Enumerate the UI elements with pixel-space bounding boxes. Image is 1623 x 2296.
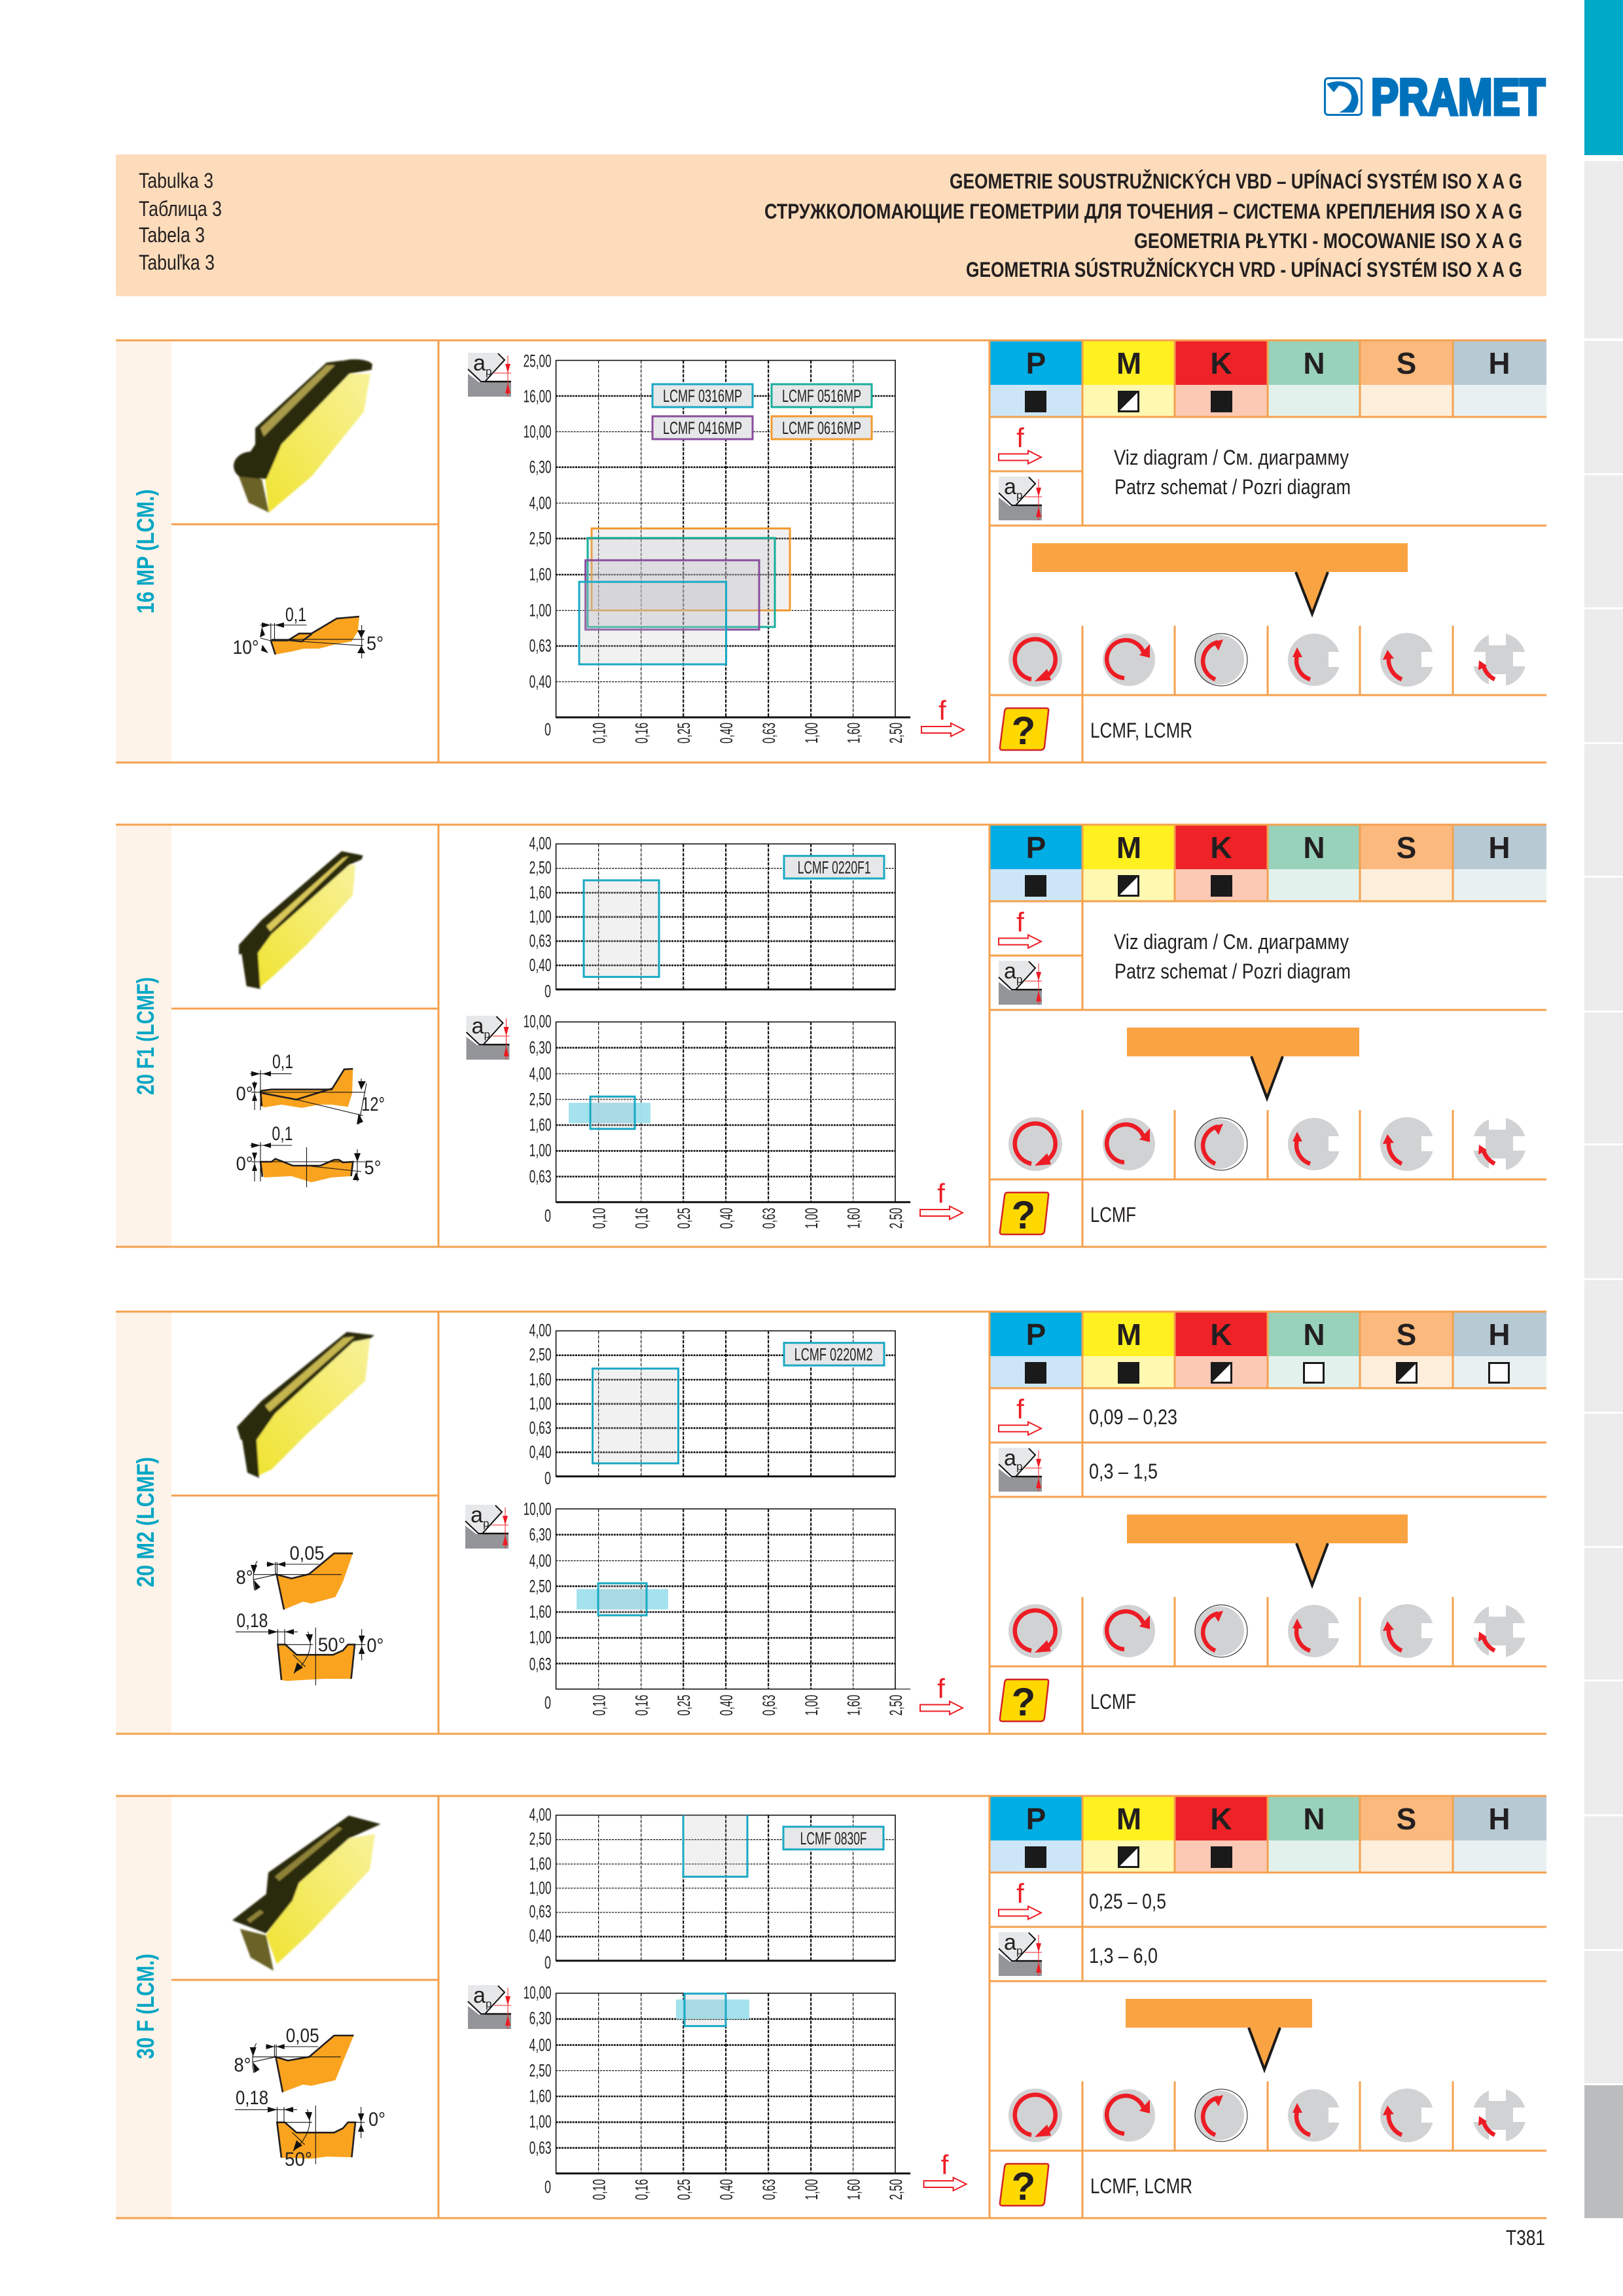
y axis labels: 1,00 — [529, 1393, 552, 1413]
table labels: Таблица 3 — [139, 197, 222, 221]
panel: 20 F1 (LCMF) — [116, 825, 1546, 1247]
range: LCMF 0220F1 — [584, 880, 659, 977]
legend: LCMF 0516MP — [782, 386, 861, 406]
y axis labels: 2,50 — [529, 1344, 552, 1364]
x axis labels: 0,63 — [759, 723, 779, 744]
icon: question: ? — [1012, 709, 1035, 753]
range: LCMF 0616MP — [592, 528, 790, 611]
feed value: 0,09 – 0,23 — [1089, 1405, 1177, 1429]
cutting profile: side: 12° — [361, 1094, 385, 1115]
y axis labels: 0,63 — [529, 1166, 552, 1186]
chart: ap vs f — [524, 351, 910, 744]
y axis labels — [524, 351, 552, 740]
legend: LCMF 0416MP — [663, 418, 742, 438]
cutting profile: front: 0,18 — [236, 1610, 268, 1632]
cutting profile: front: 50° — [318, 1634, 346, 1656]
header band — [116, 154, 1546, 296]
depth value: 0,3 – 1,5 — [1089, 1460, 1158, 1483]
icon: question — [1000, 2164, 1048, 2208]
y axis labels: 0 — [544, 981, 551, 1001]
material header letters: N — [1303, 346, 1325, 380]
y axis labels: 1,00 — [529, 906, 552, 926]
icon: feed row: f — [1016, 423, 1024, 453]
panel label: 20 M2 (LCMF) — [132, 1457, 159, 1587]
material header letters: M — [1116, 1318, 1141, 1352]
y axis labels: 1,60 — [529, 565, 552, 584]
x axis labels: 1,00 — [802, 1695, 821, 1715]
material header letters — [1026, 1802, 1510, 1836]
suitability marks — [1025, 1362, 1509, 1384]
icon: depth row: a — [1004, 1930, 1016, 1955]
icon: ap chart axis — [468, 1983, 511, 2029]
insert types: LCMF, LCMR — [1090, 2174, 1192, 2198]
x axis labels: 0,63 — [759, 2179, 779, 2200]
x axis labels: 0,10 — [590, 2179, 609, 2200]
y axis labels: 0,63 — [529, 636, 552, 656]
cutting profile: front: 5° — [364, 1157, 381, 1179]
x axis labels: 0,25 — [674, 1208, 694, 1229]
material header letters: N — [1303, 1802, 1325, 1836]
y axis labels: 0,63 — [529, 1418, 552, 1437]
cutting profile: side — [236, 1543, 353, 1609]
range: LCMF 0220M2 — [593, 1369, 678, 1463]
chart: lower range — [524, 1499, 910, 1715]
title: GEOMETRIA PŁYTKI - MOCOWANIE ISO X A G — [1134, 229, 1522, 253]
cutting profile: side: 8° — [236, 1567, 253, 1588]
y axis labels: 2,50 — [529, 529, 552, 548]
y axis labels: 16,00 — [524, 387, 552, 406]
x axis labels: 2,50 — [886, 723, 906, 744]
side tabs — [1584, 0, 1623, 2218]
title — [764, 170, 1522, 281]
y axis labels: 2,50 — [529, 857, 552, 877]
panel: 16 MP (LCM.) — [116, 340, 1546, 762]
icon: question: ? — [1012, 2164, 1035, 2208]
icon: depth row — [999, 1446, 1042, 1492]
chart: lower range — [524, 1982, 910, 2200]
x axis labels: 0,16 — [632, 2179, 652, 2200]
icon: depth row: a — [1004, 1446, 1016, 1471]
icon: f chart axis — [924, 2149, 967, 2191]
chart: upper range — [529, 833, 895, 1001]
insert types: LCMF — [1090, 1203, 1136, 1227]
material header letters: H — [1488, 1318, 1510, 1352]
icon: feed row — [999, 907, 1041, 948]
y axis labels — [524, 1982, 552, 2197]
cutting profile: front: 0,18 — [236, 2087, 268, 2109]
x axis labels — [590, 723, 906, 744]
suitability marks — [1025, 875, 1232, 897]
note: see diagram: Viz diagram / См. диаграмму — [1114, 446, 1349, 469]
logo wordmark: PRAMET — [1371, 68, 1545, 126]
logo mark — [1325, 79, 1361, 115]
suitability marks — [1025, 1846, 1232, 1868]
y axis labels: 25,00 — [524, 351, 552, 371]
operation icons — [1008, 2088, 1527, 2143]
panel label: 16 MP (LCM.) — [132, 490, 159, 614]
x axis labels: 0,10 — [590, 1208, 609, 1229]
material header letters: H — [1488, 831, 1510, 865]
operation icons — [1008, 1117, 1527, 1172]
y axis labels: 0 — [544, 720, 551, 740]
table labels — [139, 169, 222, 274]
x axis labels: 0,40 — [717, 1208, 736, 1229]
cutting profile: front — [235, 2087, 385, 2170]
icon: feed row — [999, 423, 1041, 463]
y axis labels: 1,00 — [529, 601, 552, 620]
material header letters: K — [1210, 1318, 1232, 1352]
note: see diagram: Patrz schemat / Pozri diagram — [1115, 475, 1351, 499]
range: LCMF 0516MP — [588, 538, 775, 627]
icon: question — [1000, 1193, 1048, 1237]
material header letters: P — [1026, 831, 1046, 865]
insert photo — [232, 1816, 381, 1971]
range: LCMF 0830F — [685, 1994, 726, 2026]
x axis labels: 1,00 — [802, 1208, 821, 1229]
icon: ap chart axis: p — [486, 1998, 491, 2010]
material header letters: K — [1210, 1802, 1232, 1836]
x axis labels: 0,63 — [759, 1695, 779, 1715]
material header letters: P — [1026, 1318, 1046, 1352]
material header letters: P — [1026, 1802, 1046, 1836]
icon: ap chart axis — [465, 1503, 508, 1549]
cutting profile: side: 0,1 — [272, 1051, 293, 1073]
cutting profile: 5° — [366, 633, 383, 655]
cutting profile: front: 0° — [236, 1153, 253, 1175]
legend — [784, 856, 884, 878]
y axis labels: 0,40 — [529, 955, 552, 975]
y axis labels: 0,63 — [529, 931, 552, 950]
y axis labels: 1,00 — [529, 2111, 552, 2131]
insert photo — [237, 1332, 374, 1478]
y axis labels: 0,63 — [529, 1654, 552, 1674]
insert photo — [239, 851, 363, 989]
y axis labels: 10,00 — [524, 422, 552, 442]
x axis labels: 0,63 — [759, 1208, 779, 1229]
icon: depth row — [999, 475, 1042, 520]
x axis labels: 0,10 — [590, 723, 609, 744]
y axis labels: 1,00 — [529, 1627, 552, 1647]
icon: f chart axis: f — [941, 2149, 949, 2180]
legend: LCMF 0316MP — [663, 386, 742, 406]
suitability marks — [1025, 391, 1232, 412]
x axis labels: 1,00 — [802, 723, 821, 744]
x axis labels: 0,10 — [590, 1695, 609, 1715]
application range bar — [1032, 543, 1408, 614]
icon: depth row: p — [1016, 1460, 1022, 1473]
x axis labels: 2,50 — [886, 1208, 906, 1229]
icon: ap chart axis: p — [483, 1517, 489, 1530]
chart: upper range — [529, 1804, 895, 1972]
legend: LCMF 0830F — [800, 1829, 867, 1848]
material header letters: S — [1397, 1318, 1416, 1352]
y axis labels: 2,50 — [529, 1576, 552, 1596]
y axis labels: 0 — [544, 1206, 551, 1225]
x axis labels — [590, 2179, 906, 2200]
x axis labels: 0,25 — [674, 1695, 694, 1715]
material header letters: S — [1397, 1802, 1416, 1836]
icon: ap chart axis — [468, 351, 511, 397]
icon: f chart axis — [921, 695, 964, 736]
cutting profile: side: 0,05 — [289, 1543, 325, 1564]
legend — [784, 1343, 884, 1365]
y axis labels: 1,60 — [529, 1854, 552, 1873]
y axis labels — [524, 1499, 552, 1712]
legend: LCMF 0220F1 — [798, 858, 871, 878]
y axis labels: 2,50 — [529, 2060, 552, 2080]
x axis labels: 0,40 — [717, 723, 736, 744]
cutting profile: side: 0,05 — [286, 2025, 319, 2047]
note: see diagram — [1114, 930, 1351, 983]
insert types: LCMF, LCMR — [1090, 719, 1192, 742]
y axis labels — [529, 1320, 552, 1488]
application range bar — [1127, 1515, 1408, 1585]
x axis labels: 2,50 — [886, 2179, 906, 2200]
operation icons — [1008, 1604, 1527, 1659]
range: LCMF 0220M2 — [598, 1583, 647, 1615]
legend: LCMF 0220M2 — [794, 1345, 873, 1365]
icon: f chart axis: f — [937, 1673, 945, 1704]
y axis labels: 0 — [544, 2177, 551, 2197]
table labels: Tabulka 3 — [139, 169, 213, 192]
y axis labels: 1,60 — [529, 1115, 552, 1134]
feed value: 0,25 – 0,5 — [1089, 1890, 1166, 1913]
icon: question — [1000, 1679, 1048, 1724]
note: see diagram: Patrz schemat / Pozri diagram — [1115, 960, 1351, 983]
material header letters: H — [1488, 1802, 1510, 1836]
x axis labels — [590, 1208, 906, 1229]
icon: feed row: f — [1016, 1394, 1024, 1424]
material header letters: N — [1303, 1318, 1325, 1352]
legend: LCMF 0616MP — [782, 418, 861, 438]
icon: question: ? — [1012, 1680, 1035, 1724]
y axis labels: 6,30 — [529, 457, 552, 477]
icon: depth row: p — [1016, 973, 1022, 986]
x axis labels — [590, 1695, 906, 1715]
x axis labels: 0,40 — [717, 2179, 736, 2200]
cutting profile: front — [236, 1610, 383, 1685]
y axis labels: 0 — [544, 1468, 551, 1488]
icon: depth row: a — [1004, 959, 1016, 984]
material header letters: M — [1116, 1802, 1141, 1836]
cutting profile: front: 0° — [366, 1635, 383, 1657]
x axis labels: 1,60 — [844, 723, 864, 744]
y axis labels: 4,00 — [529, 2035, 552, 2054]
y axis labels — [529, 1804, 552, 1972]
y axis labels: 10,00 — [524, 1982, 552, 2002]
panel label: 20 F1 (LCMF) — [132, 977, 159, 1095]
material header letters: K — [1210, 346, 1232, 380]
chart: upper range — [529, 1320, 895, 1488]
application range bar — [1126, 1999, 1312, 2070]
range: LCMF 0220F1 — [590, 1096, 635, 1129]
depth value: 1,3 – 6,0 — [1089, 1944, 1158, 1967]
cutting profile: side: 8° — [234, 2054, 251, 2076]
icon: f chart axis — [920, 1178, 963, 1219]
icon: ap chart axis: a — [473, 351, 486, 376]
y axis labels: 2,50 — [529, 1829, 552, 1848]
title: GEOMETRIA SÚSTRUŽNÍCKYCH VRD - UPÍNACÍ SYSTÉM ISO X A G — [966, 258, 1522, 281]
logo: PRAMET — [1325, 68, 1545, 126]
range: LCMF 0416MP — [586, 560, 759, 630]
icon: depth row — [999, 1930, 1042, 1976]
section tab — [1584, 2085, 1623, 2218]
operation icons — [1008, 632, 1527, 687]
icon: ap chart axis: a — [473, 1983, 486, 2008]
icon: depth row: p — [1016, 1945, 1022, 1957]
icon: depth row — [999, 959, 1042, 1005]
y axis labels: 1,60 — [529, 1369, 552, 1389]
icon: feed row: f — [1016, 907, 1024, 937]
cutting profile: side: 0° — [236, 1083, 253, 1105]
cutting profile: front: 0,1 — [272, 1123, 293, 1145]
material header letters: M — [1116, 831, 1141, 865]
y axis labels: 1,60 — [529, 1602, 552, 1621]
x axis labels: 0,16 — [632, 1208, 652, 1229]
cutting profile: side — [234, 2025, 353, 2092]
material header letters: M — [1116, 346, 1141, 380]
panel: 30 F (LCM.) — [116, 1796, 1546, 2218]
icon: ap chart axis: a — [471, 1503, 483, 1528]
active tab — [1584, 0, 1623, 155]
y axis labels: 6,30 — [529, 1524, 552, 1544]
cutting profile: front: 0° — [368, 2109, 385, 2130]
icon: ap chart axis: p — [486, 365, 491, 378]
table labels: Tabela 3 — [139, 223, 205, 247]
panel label: 30 F (LCM.) — [132, 1954, 159, 2059]
y axis labels: 4,00 — [529, 1551, 552, 1570]
x axis labels: 2,50 — [886, 1695, 906, 1715]
table labels: Tabuľka 3 — [139, 251, 215, 274]
cutting profile: side — [236, 1051, 385, 1124]
side band — [116, 1312, 171, 1734]
material header letters: S — [1397, 346, 1416, 380]
x axis labels: 1,60 — [844, 2179, 864, 2200]
y axis labels: 1,60 — [529, 2086, 552, 2106]
icon: question: ? — [1012, 1193, 1035, 1237]
note: see diagram: Viz diagram / См. диаграмму — [1114, 930, 1349, 954]
y axis labels: 0 — [544, 1952, 551, 1972]
x axis labels: 1,60 — [844, 1208, 864, 1229]
icon: f chart axis: f — [938, 695, 946, 726]
y axis labels: 6,30 — [529, 2008, 552, 2028]
icon: feed row — [999, 1878, 1041, 1919]
application range bar — [1127, 1028, 1359, 1098]
icon: f chart axis: f — [937, 1178, 945, 1209]
x axis labels: 0,25 — [674, 723, 694, 744]
y axis labels: 1,60 — [529, 882, 552, 902]
icon: question — [1000, 708, 1048, 753]
y axis labels: 4,00 — [529, 1320, 552, 1340]
y axis labels — [529, 833, 552, 1001]
material header letters: H — [1488, 346, 1510, 380]
side band — [116, 825, 171, 1247]
y axis labels: 0 — [544, 1693, 551, 1712]
range: LCMF 0830F — [683, 1815, 747, 1876]
y axis labels: 4,00 — [529, 1064, 552, 1083]
insert types: LCMF — [1090, 1690, 1136, 1713]
material header letters: N — [1303, 831, 1325, 865]
icon: ap chart axis: a — [471, 1014, 484, 1039]
icon: depth row: p — [1016, 489, 1022, 501]
icon: depth row: a — [1004, 475, 1016, 499]
cutting profile: front — [236, 1123, 381, 1187]
page number: T381 — [1506, 2226, 1545, 2250]
material header letters: K — [1210, 831, 1232, 865]
note: see diagram — [1114, 446, 1351, 499]
icon: ap chart axis — [466, 1014, 509, 1060]
y axis labels: 1,00 — [529, 1878, 552, 1897]
y axis labels: 2,50 — [529, 1089, 552, 1109]
x axis labels: 0,16 — [632, 1695, 652, 1715]
legend — [652, 384, 872, 439]
y axis labels: 0,40 — [529, 1442, 552, 1462]
side band — [116, 1796, 171, 2218]
x axis labels: 0,25 — [674, 2179, 694, 2200]
material header letters: S — [1397, 831, 1416, 865]
icon: ap chart axis: p — [484, 1028, 490, 1041]
y axis labels: 0,40 — [529, 672, 552, 692]
icon: feed row — [999, 1394, 1041, 1435]
y axis labels: 10,00 — [524, 1499, 552, 1518]
y axis labels — [524, 1011, 552, 1225]
y axis labels: 4,00 — [529, 1804, 552, 1824]
cutting profile: 0,1 — [285, 604, 306, 626]
icon: f chart axis — [920, 1673, 963, 1715]
insert photo — [234, 359, 372, 512]
cutting profile: 10° — [233, 637, 259, 658]
material header letters — [1026, 831, 1510, 865]
range: LCMF 0316MP — [579, 582, 726, 664]
material header letters: P — [1026, 346, 1046, 380]
chart: lower range — [524, 1011, 910, 1229]
y axis labels: 1,00 — [529, 1140, 552, 1160]
material header letters — [1026, 1318, 1510, 1352]
icon: feed row: f — [1016, 1878, 1024, 1909]
x axis labels: 1,60 — [844, 1695, 864, 1715]
y axis labels: 0,63 — [529, 1901, 552, 1921]
x axis labels: 0,16 — [632, 723, 652, 744]
cutting profile: front: 50° — [285, 2149, 312, 2170]
legend — [783, 1827, 883, 1850]
cutting profile — [233, 604, 383, 658]
y axis labels: 0,40 — [529, 1926, 552, 1945]
y axis labels: 0,63 — [529, 2138, 552, 2157]
y axis labels: 4,00 — [529, 833, 552, 853]
side band — [116, 340, 171, 762]
y axis labels: 6,30 — [529, 1037, 552, 1057]
y axis labels: 10,00 — [524, 1011, 552, 1031]
x axis labels: 1,00 — [802, 2179, 821, 2200]
x axis labels: 0,40 — [717, 1695, 736, 1715]
panel: 20 M2 (LCMF) — [116, 1312, 1546, 1734]
material header letters — [1026, 346, 1510, 380]
y axis labels: 4,00 — [529, 493, 552, 513]
